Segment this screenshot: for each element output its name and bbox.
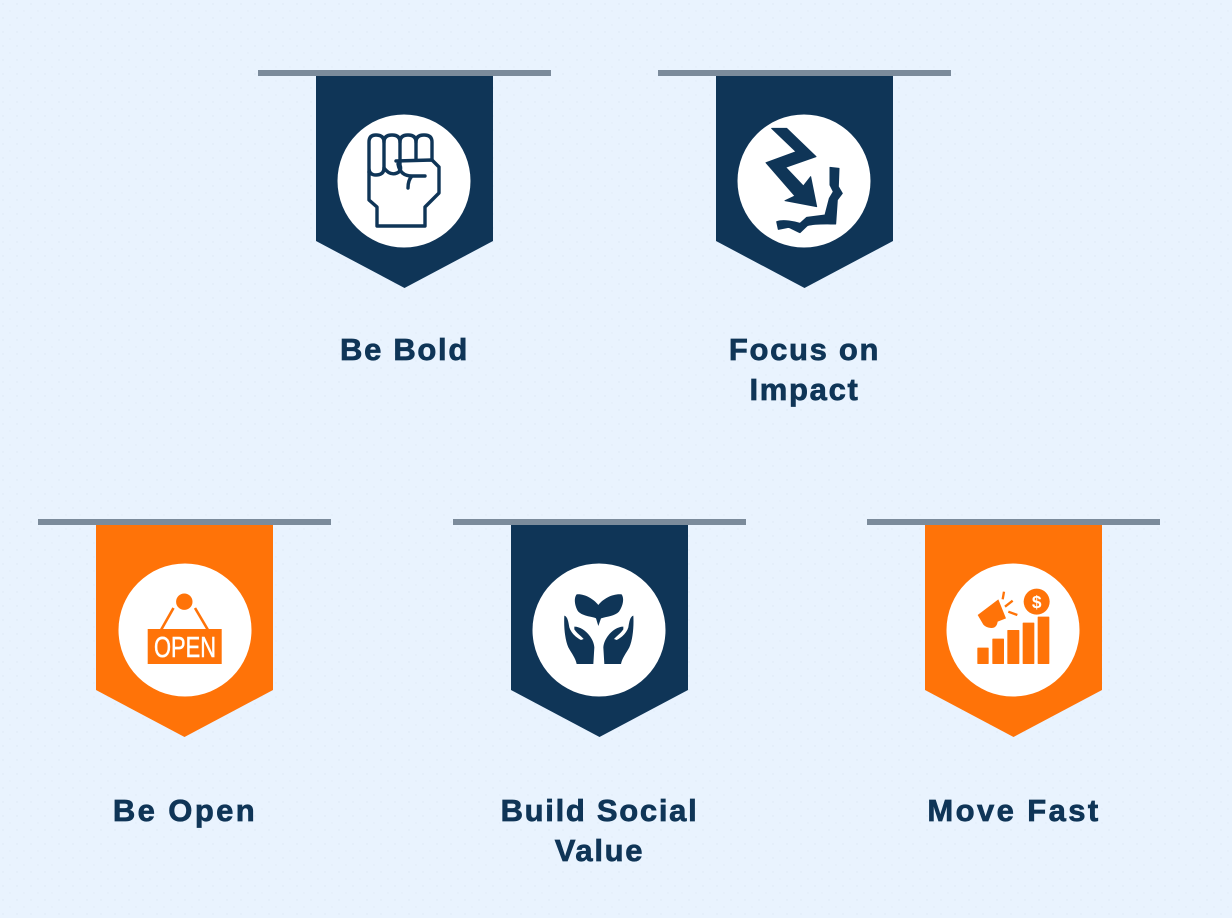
- sign strings: [161, 608, 208, 630]
- hanger bar: [658, 70, 951, 76]
- panel: Focus on Impact: [658, 70, 951, 407]
- sign text: OPEN: [154, 632, 216, 664]
- dollar coin: [1024, 589, 1050, 615]
- panel: Be Open: [38, 519, 331, 828]
- sound rays: [1003, 592, 1017, 615]
- icon: fist: [369, 135, 439, 226]
- icon: growth chart with megaphone and coin: [977, 589, 1050, 664]
- label: Be Open: [113, 793, 257, 828]
- panel: Build Social Value: [453, 519, 746, 868]
- dollar sign: $: [1032, 592, 1042, 612]
- bars: [977, 617, 1049, 664]
- icon circle: [118, 564, 252, 696]
- icon: lightning strike and crack: [766, 128, 842, 233]
- icon: open sign: [148, 594, 222, 664]
- navy banner: [316, 76, 493, 288]
- label: Move Fast: [927, 793, 1101, 828]
- label second line: Value: [555, 833, 644, 868]
- icon circle: [532, 564, 666, 696]
- label: Focus on: [729, 332, 880, 367]
- orange banner: [96, 525, 273, 737]
- panel: Move Fast: [867, 519, 1160, 828]
- sign hook: [176, 594, 192, 610]
- label second line: Impact: [749, 372, 860, 407]
- icon circle: [738, 114, 870, 248]
- icon: hands holding sprout: [564, 594, 633, 664]
- orange banner: [925, 525, 1102, 737]
- megaphone: [978, 599, 1006, 628]
- label: Build Social: [501, 793, 698, 828]
- hanger bar: [258, 70, 551, 76]
- navy banner: [511, 525, 688, 737]
- panel: Be Bold: [258, 70, 551, 367]
- icon circle: [946, 564, 1080, 696]
- sign board: [148, 629, 222, 664]
- hanger bar: [453, 519, 746, 525]
- hanger bar: [867, 519, 1160, 525]
- icon circle: [338, 114, 470, 248]
- label: Be Bold: [340, 332, 469, 367]
- navy banner: [716, 76, 893, 288]
- hanger bar: [38, 519, 331, 525]
